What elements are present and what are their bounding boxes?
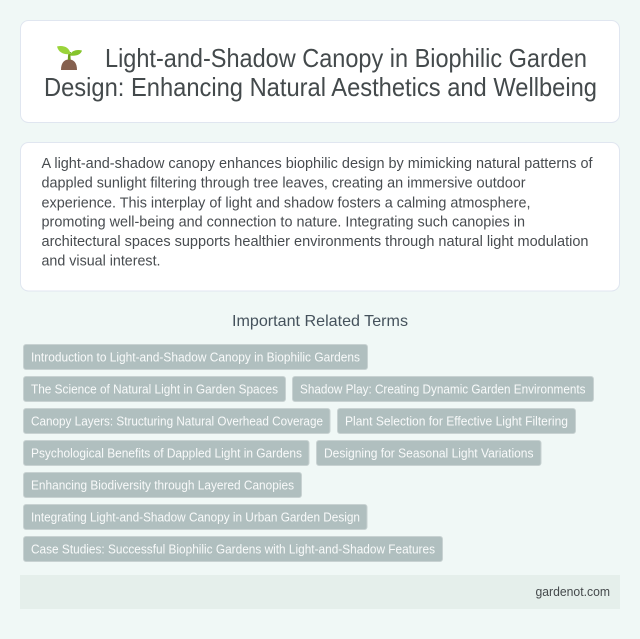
title [44, 45, 597, 102]
tag: Shadow Play: Creating Dynamic Garden Environments [300, 382, 586, 396]
title: Design: Enhancing Natural Aesthetics and Wellbeing [44, 74, 597, 102]
tag [292, 376, 594, 402]
text block: description: dappled sunlight filtering through tree leaves, creating an immersive outdoor [42, 176, 526, 192]
panel: title card [20, 20, 620, 122]
tag: Designing for Seasonal Light Variations [324, 446, 534, 460]
tag [24, 344, 368, 370]
panel: introduction [20, 142, 620, 291]
text block: description [42, 156, 593, 270]
footer text: gardenot.com [536, 584, 610, 599]
tag: Canopy Layers: Structuring Natural Overhead Coverage [31, 414, 323, 428]
tag [24, 504, 367, 530]
tag: Case Studies: Successful Biophilic Gardens with Light-and-Shadow Features [31, 542, 435, 556]
tag: Introduction to Light-and-Shadow Canopy in Biophilic Gardens [31, 350, 360, 364]
tag [24, 536, 442, 562]
text block: description: experience. This interplay of light and shadow fosters a calming atmosphere, [42, 196, 530, 212]
tag [338, 408, 576, 434]
text block: description: architectural spaces supports healthier environments through natural light modulation [42, 234, 588, 250]
tag [316, 440, 541, 466]
title: Light-and-Shadow Canopy in Biophilic Garden [105, 45, 587, 73]
tag: Plant Selection for Effective Light Filtering [345, 414, 568, 428]
tag [24, 440, 309, 466]
tag [24, 376, 286, 402]
text block: description: promoting well-being and connection to nature. Integrating such canopies in [42, 214, 525, 230]
tag: Enhancing Biodiversity through Layered Canopies [31, 478, 294, 492]
icon: sprout [57, 46, 82, 70]
tag [24, 472, 302, 498]
text block: description: and visual interest. [42, 254, 160, 270]
tag: The Science of Natural Light in Garden Spaces [31, 382, 278, 396]
tag list [24, 344, 594, 562]
tag: Integrating Light-and-Shadow Canopy in Urban Garden Design [31, 510, 360, 524]
tag [24, 408, 330, 434]
heading: related terms: Important Related Terms [232, 313, 408, 330]
tag: Psychological Benefits of Dappled Light in Gardens [31, 446, 302, 460]
footer bar [20, 575, 620, 609]
text block: description: A light-and-shadow canopy enhances biophilic design by mimicking natural patterns of [42, 156, 593, 172]
